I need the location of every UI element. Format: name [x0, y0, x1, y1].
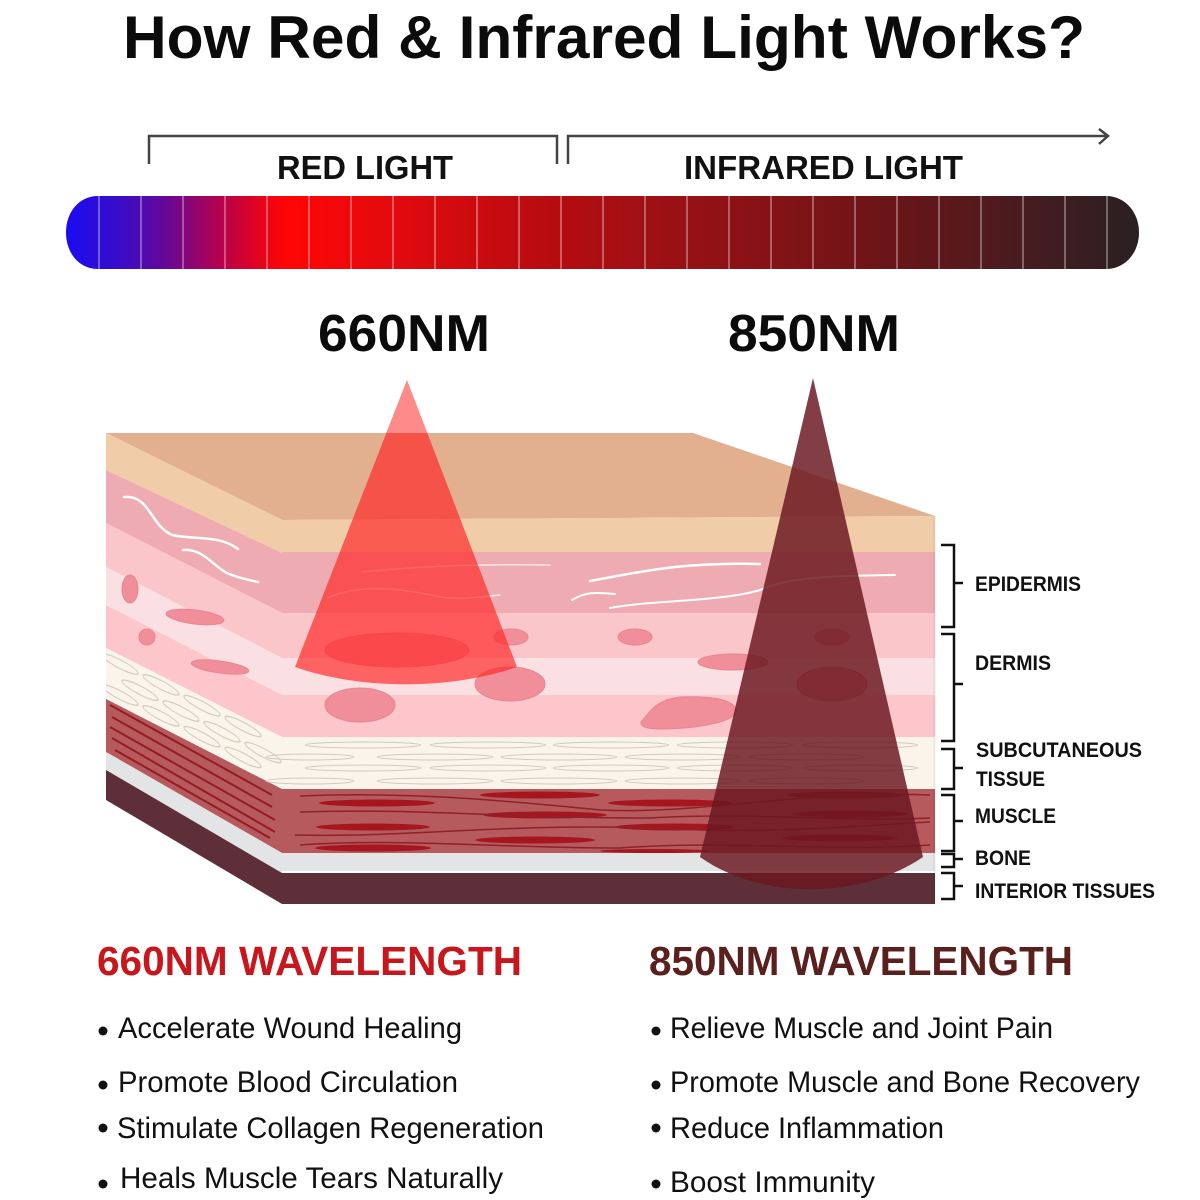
layer labels: TISSUE — [976, 768, 1045, 791]
muscle fibres left face — [110, 705, 275, 838]
850nm benefits list: Boost Immunity — [670, 1166, 875, 1199]
fat cells front face — [266, 742, 918, 784]
infrared light label: INFRARED LIGHT — [684, 149, 963, 186]
850nm benefits list — [652, 1012, 1140, 1199]
layer labels: DERMIS — [975, 652, 1051, 675]
660nm benefits list: Promote Blood Circulation — [118, 1066, 458, 1099]
side wall shading — [933, 516, 936, 904]
fat cells left face — [106, 654, 282, 768]
spectrum bar — [66, 196, 1139, 269]
850nm benefits list: Reduce Inflammation — [670, 1112, 944, 1145]
850nm benefits list: Promote Muscle and Bone Recovery — [670, 1066, 1140, 1099]
red light range bracket — [149, 136, 557, 164]
layer labels: SUBCUTANEOUS — [976, 739, 1142, 762]
blood vessels — [122, 575, 867, 729]
850nm benefits list: Relieve Muscle and Joint Pain — [670, 1012, 1053, 1045]
layer labels: BONE — [975, 847, 1031, 870]
850nm label: 850NM — [728, 305, 900, 363]
660nm wavelength heading: 660NM WAVELENGTH — [97, 938, 522, 984]
title: How Red & Infrared Light Works? — [123, 4, 1085, 71]
fibres in dermis — [124, 497, 895, 608]
layer labels: INTERIOR TISSUES — [975, 880, 1155, 903]
850nm infrared light cone — [700, 378, 923, 889]
660nm benefits list: Heals Muscle Tears Naturally — [120, 1162, 503, 1195]
skin cross-section diagram — [102, 378, 936, 904]
red light label: RED LIGHT — [277, 149, 453, 186]
skin top surface — [106, 433, 935, 520]
660nm benefits list — [98, 1012, 544, 1195]
660nm red light cone — [295, 380, 517, 684]
front face layers — [282, 516, 935, 904]
infrared light range arrow — [568, 129, 1108, 164]
layer brackets — [941, 545, 963, 899]
layer labels: MUSCLE — [975, 805, 1056, 828]
660nm benefits list: Accelerate Wound Healing — [118, 1012, 462, 1045]
left face layers — [106, 433, 282, 904]
850nm wavelength heading: 850NM WAVELENGTH — [649, 938, 1073, 984]
660nm benefits list: Stimulate Collagen Regeneration — [117, 1112, 544, 1145]
layer labels — [975, 573, 1155, 903]
muscle fibres front face — [295, 792, 930, 853]
660nm label: 660NM — [318, 305, 490, 363]
layer labels: EPIDERMIS — [975, 573, 1081, 596]
